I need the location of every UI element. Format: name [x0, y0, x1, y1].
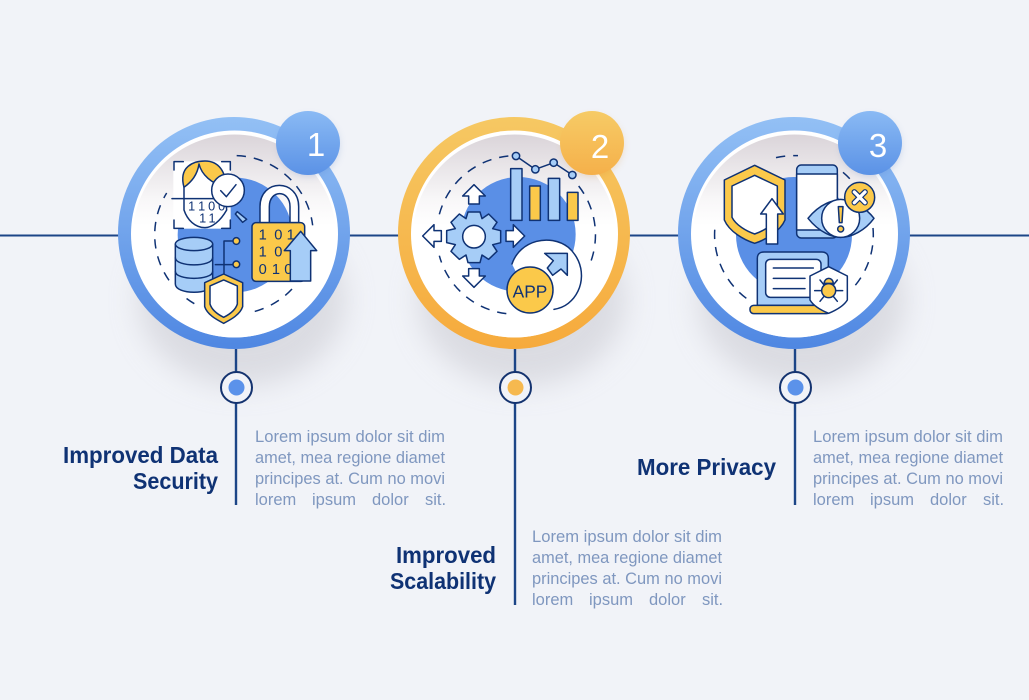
connector 3 [780, 349, 811, 505]
heading 1 [63, 442, 218, 494]
icon: app upgrade [507, 240, 581, 313]
text block 3: Lorem ipsum dolor sit dim [813, 428, 1003, 446]
badge 3 [838, 111, 902, 176]
text block 2: ipsum [589, 591, 633, 609]
icon: padlock: 0 [284, 262, 292, 278]
icon: data security [155, 156, 317, 323]
step 3 circle [678, 111, 910, 386]
icon: face scan: 1 [208, 211, 216, 225]
icon: face scan: 1 [198, 200, 205, 214]
icon: face scan: 1 [199, 211, 206, 225]
icon: padlock: 1 [259, 227, 267, 243]
text block 3: amet, mea regione diamet [813, 449, 1003, 467]
icon: face scan: 0 [208, 200, 215, 214]
icon: face scan: 1 [188, 200, 195, 214]
badge 2: 2 [591, 128, 609, 165]
icon: privacy [715, 156, 875, 314]
badge 3: 3 [869, 127, 887, 164]
text block 2: principes at. Cum no movi [532, 570, 722, 588]
icon: padlock: 1 [259, 245, 267, 261]
connector 2 [500, 349, 531, 605]
heading 1: Security [133, 468, 218, 494]
heading 1: Improved Data [63, 442, 218, 468]
text block 3: sit. [983, 491, 1004, 509]
icon: phone [797, 165, 837, 238]
icon: laptop with bug shield [750, 252, 847, 314]
text block 3: dolor [930, 491, 967, 509]
text block 1: sit. [425, 491, 446, 509]
text block 3: lorem [813, 491, 854, 509]
icon: shield with arrow [724, 165, 785, 244]
icon: padlock: 0 [274, 245, 282, 261]
text block 1: principes at. Cum no movi [255, 470, 445, 488]
text block 2: dolor [649, 591, 686, 609]
badge 1 [276, 111, 340, 176]
text block 2: Lorem ipsum dolor sit dim [532, 528, 722, 546]
text block 1: amet, mea regione diamet [255, 449, 445, 467]
text block 2 [532, 528, 723, 609]
heading 2: Improved [396, 542, 496, 568]
text block 1: Lorem ipsum dolor sit dim [255, 428, 445, 446]
text block 1: ipsum [312, 491, 356, 509]
heading 3: More Privacy [637, 454, 776, 480]
step 2 circle [398, 111, 630, 386]
text block 2: amet, mea regione diamet [532, 549, 722, 567]
icon: scalability [423, 152, 595, 314]
text block 3: principes at. Cum no movi [813, 470, 1003, 488]
icon: padlock: 0 [274, 227, 282, 243]
icon: gear with arrows [423, 185, 525, 287]
horizontal timeline [0, 234, 1029, 236]
icon: padlock [252, 185, 317, 281]
text block 3 [813, 428, 1004, 509]
icon: app upgrade: APP [513, 281, 547, 301]
icon: database [175, 237, 240, 292]
icon: padlock: 1 [287, 227, 295, 243]
icon: shield [205, 274, 243, 323]
text block 1: lorem [255, 491, 296, 509]
connector 1 [221, 349, 252, 505]
icon: padlock: 1 [272, 262, 280, 278]
text block 1 [255, 428, 446, 509]
text block 2: lorem [532, 591, 573, 609]
heading 2: Scalability [390, 568, 496, 594]
heading 2 [390, 542, 496, 594]
text block 3: ipsum [870, 491, 914, 509]
step 1 circle [118, 111, 350, 386]
text block 1: dolor [372, 491, 409, 509]
icon: face scan [172, 161, 247, 229]
icon: eye warning [808, 182, 875, 237]
icon: bar chart [511, 152, 578, 220]
text block 2: sit. [702, 591, 723, 609]
badge 2 [560, 111, 624, 176]
badge 1: 1 [307, 126, 325, 163]
icon: face scan: 0 [218, 200, 225, 214]
icon: padlock: 0 [259, 262, 267, 278]
